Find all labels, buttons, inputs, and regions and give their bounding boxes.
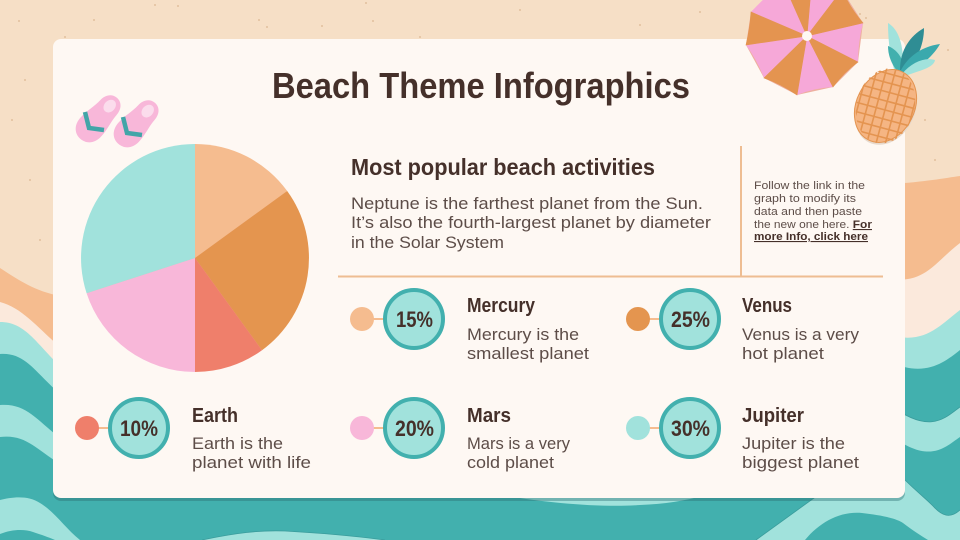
item: Venus 25%: 25%: [671, 307, 710, 332]
dividers: [338, 146, 883, 276]
item: Mercury 15%: Mercury is the: [467, 325, 579, 344]
item: Jupiter 30%: Jupiter is the: [742, 434, 845, 453]
icon: beach umbrella: [746, 0, 863, 95]
item: Venus 25%: hot planet: [742, 344, 824, 363]
item: Mars 20%: Mars: [467, 405, 511, 427]
text block: side note with link: [754, 180, 873, 243]
item: Mercury 15%: 15%: [396, 307, 433, 332]
item: Mercury 15%: smallest planet: [467, 344, 589, 363]
text block: side note with link: the new one here. For: [754, 219, 873, 231]
item: Mars 20%: cold planet: [467, 453, 554, 472]
item: Earth 10%: [75, 399, 311, 472]
item: Venus 25%: [626, 290, 860, 363]
item: Earth 10%: 10%: [120, 416, 158, 441]
item: Jupiter 30%: Jupiter: [742, 405, 804, 427]
item: Jupiter 30%: [626, 399, 859, 472]
item: Mercury 15%: [350, 290, 589, 363]
item: Mars 20%: 20%: [395, 416, 434, 441]
text block: Neptune description: in the Solar System: [351, 233, 504, 252]
text block: Neptune description: It’s also the fourth-largest planet by diameter: [351, 213, 711, 232]
item: Venus 25%: Venus is a very: [742, 325, 860, 344]
item: Jupiter 30%: biggest planet: [742, 453, 859, 472]
text block: Neptune description: [351, 194, 711, 252]
item: Earth 10%: Earth: [192, 405, 238, 427]
item: Earth 10%: planet with life: [192, 453, 311, 472]
panel: main card: [53, 39, 905, 501]
title: Beach Theme Infographics: [272, 65, 690, 106]
item: Mars 20%: Mars is a very: [467, 434, 570, 453]
text block: side note with link: more Info, click here: [754, 231, 868, 243]
heading: most popular beach activities: Most popular beach activities: [351, 154, 655, 180]
text block: side note with link: Follow the link in the: [754, 180, 865, 192]
text block: Neptune description: Neptune is the farthest planet from the Sun.: [351, 194, 703, 213]
icon: pineapple: [854, 23, 940, 145]
item: Mars 20%: [350, 399, 570, 472]
text block: side note with link: data and then paste: [754, 206, 862, 218]
text block: side note with link: graph to modify its: [754, 193, 857, 205]
pie chart: [81, 144, 309, 372]
item: Venus 25%: Venus: [742, 295, 792, 317]
item: Earth 10%: Earth is the: [192, 434, 283, 453]
item: Mercury 15%: Mercury: [467, 295, 536, 317]
icon: flip-flops: [70, 89, 165, 153]
item: Jupiter 30%: 30%: [671, 416, 710, 441]
